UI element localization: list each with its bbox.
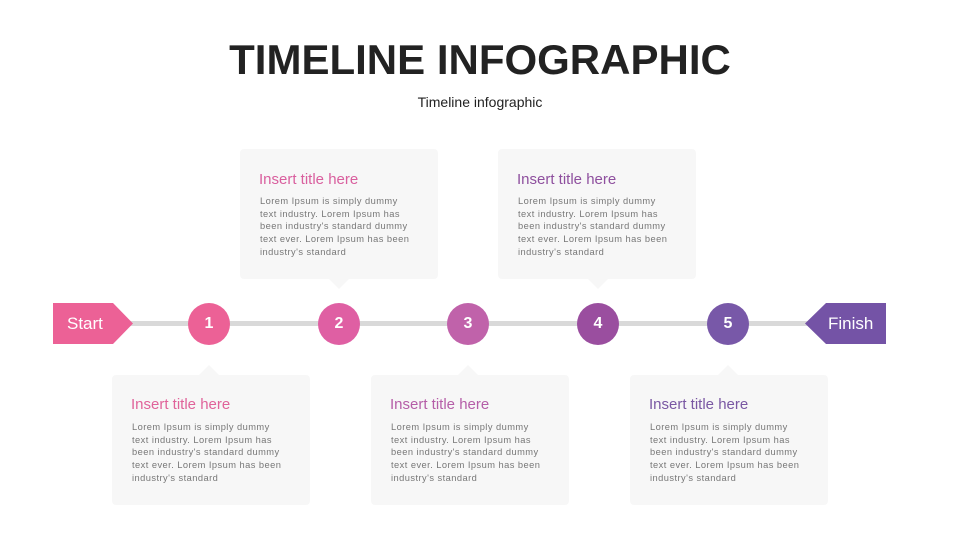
card: top 2: [240, 149, 438, 279]
title: TIMELINE INFOGRAPHIC: [229, 36, 731, 83]
step 4: 4: [594, 315, 602, 332]
start marker: Start: [67, 314, 103, 333]
step 4: [577, 303, 619, 345]
card: top 2: Insert title here: [259, 171, 358, 188]
card: bottom 1: Lorem Ipsum is simply dummy text industry. Lorem Ipsum has been industry's standard dummy text ever. Lorem Ipsum has been industry's standard: [132, 422, 281, 483]
subtitle: Timeline infographic: [418, 94, 542, 110]
timeline line: [130, 321, 810, 326]
card: bottom 5: [630, 375, 828, 505]
card: bottom 3: Insert title here: [390, 396, 489, 413]
start marker: [53, 303, 133, 344]
card: bottom 5: Lorem Ipsum is simply dummy text industry. Lorem Ipsum has been industry's standard dummy text ever. Lorem Ipsum has been industry's standard: [650, 422, 799, 483]
step 2: [318, 303, 360, 345]
card: top 4: Insert title here: [517, 171, 616, 188]
step 5: 5: [724, 315, 732, 332]
step 3: [447, 303, 489, 345]
finish marker: Finish: [828, 314, 873, 333]
step 3: 3: [464, 315, 472, 332]
step 1: 1: [205, 315, 213, 332]
finish marker: [805, 303, 886, 344]
step 2: 2: [335, 315, 343, 332]
card: bottom 3: Lorem Ipsum is simply dummy text industry. Lorem Ipsum has been industry's standard dummy text ever. Lorem Ipsum has been industry's standard: [391, 422, 540, 483]
card: top 4: Lorem Ipsum is simply dummy text industry. Lorem Ipsum has been industry's standard dummy text ever. Lorem Ipsum has been industry's standard: [518, 196, 667, 257]
card: bottom 3: [371, 375, 569, 505]
step 5: [707, 303, 749, 345]
card: bottom 1: [112, 375, 310, 505]
step 1: [188, 303, 230, 345]
card: bottom 5: Insert title here: [649, 396, 748, 413]
card: bottom 1: Insert title here: [131, 396, 230, 413]
card: top 4: [498, 149, 696, 279]
card: top 2: Lorem Ipsum is simply dummy text industry. Lorem Ipsum has been industry's standard dummy text ever. Lorem Ipsum has been industry's standard: [260, 196, 409, 257]
